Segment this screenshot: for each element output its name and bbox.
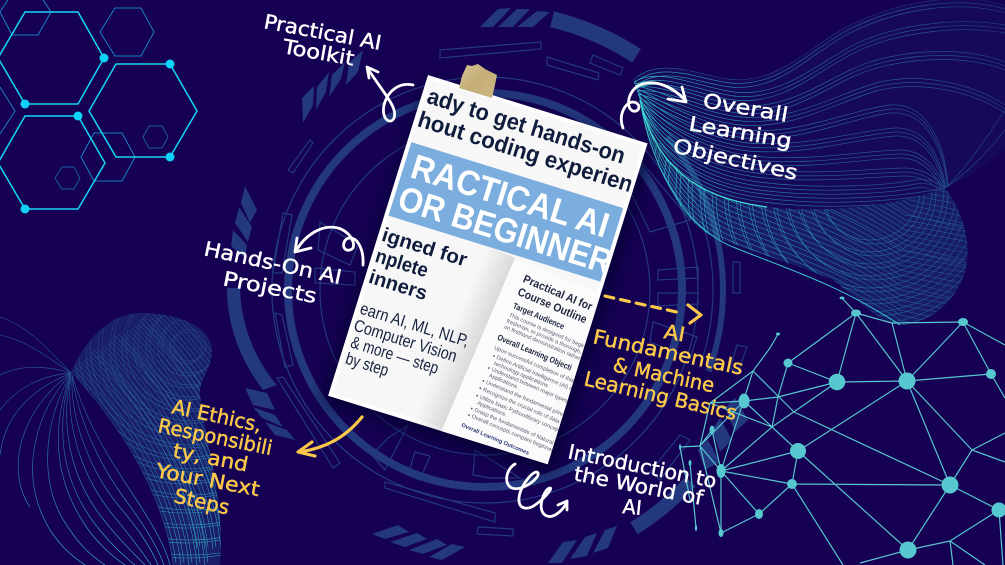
flyer subheading: igned for <box>379 224 470 271</box>
label: ai fundamentals and machine learning basics: Learning Basics <box>582 366 739 425</box>
label: ai ethics responsibility next steps: AI Ethics, <box>170 394 264 437</box>
label: hands-on ai projects <box>202 236 344 308</box>
outline body text: on firsthand demonstration rather, alike <box>503 324 594 368</box>
flyer subheading: nplete <box>373 245 431 282</box>
flyer headline: ady to get hands-on <box>424 83 629 169</box>
label: practical ai toolkit: Practical AI <box>262 9 383 55</box>
outline title: Target Audience <box>512 301 566 331</box>
label: hands-on ai projects: Hands-On AI <box>202 236 344 289</box>
label: ai fundamentals and machine learning basics: Fundamentals <box>591 324 746 380</box>
outline footer link: Overall Learning Outcomes <box>460 423 530 457</box>
arrow: learning objectives <box>621 83 686 128</box>
arrow: practical ai toolkit <box>367 67 413 121</box>
outline body text: Utilize basic Python/library concepts <box>479 395 564 435</box>
wave mesh: bottom left <box>0 313 221 565</box>
label: introduction to the world of ai: Introduction to <box>566 439 719 493</box>
flyer description: Computer Vision <box>352 316 459 366</box>
outline body text: Understand between major types of <box>490 367 574 407</box>
label: overall learning objectives: Learning <box>687 111 794 153</box>
flyer subheading: inners <box>366 266 430 305</box>
label: overall learning objectives <box>671 88 800 185</box>
arrow: introduction curl <box>507 464 567 517</box>
flyer blue banner <box>388 142 628 283</box>
tech hatch segments <box>227 8 748 563</box>
concentric tech rings <box>204 9 766 565</box>
outline title: Course Outline <box>516 286 588 326</box>
label: ai fundamentals and machine learning basics <box>582 319 746 425</box>
outline body text: Applications. <box>476 401 508 419</box>
label: ai ethics responsibility next steps: Your Next <box>153 458 262 501</box>
outline title <box>498 274 593 370</box>
outline body text: This course is designed for beginners a <box>508 313 601 357</box>
label: ai ethics responsibility next steps <box>153 394 274 519</box>
label: ai fundamentals and machine learning basics: & Machine <box>611 352 717 397</box>
paper flyer <box>328 75 648 464</box>
outline body text: Applications. <box>488 373 520 391</box>
label: hands-on ai projects: Projects <box>221 266 319 308</box>
neural network <box>679 296 1005 565</box>
outline body text: technology applications <box>493 361 549 389</box>
label: ai ethics responsibility next steps: Steps <box>172 483 232 519</box>
flyer description: by step <box>343 349 391 380</box>
flyer description: earn AI, ML, NLP, <box>358 299 471 351</box>
outline body text: Define Artificial Intelligence (AI) and i <box>495 355 582 396</box>
outline body text: Understand the fundamental principles of <box>485 380 581 425</box>
flyer blue banner: OR BEGINNER <box>393 179 617 282</box>
flyer description: & more — step <box>348 333 441 378</box>
outline title: Overall Learning Objecti <box>496 332 574 372</box>
flyer subheading <box>369 227 468 300</box>
label: overall learning objectives: Overall <box>701 88 790 127</box>
label: ai fundamentals and machine learning basics: AI <box>662 319 687 347</box>
label: ai ethics responsibility next steps: ty, and <box>171 438 250 476</box>
folded course outline page <box>421 250 601 464</box>
outline body text: Overall concepts compare beginners <box>470 414 557 455</box>
outline body text: Recognize the crucial role of data in the <box>482 387 575 431</box>
label: ai ethics responsibility next steps: Responsibili <box>156 413 274 460</box>
label: practical ai toolkit: Toolkit <box>280 34 356 70</box>
arrow: ai ethics <box>298 417 362 456</box>
tape <box>459 64 497 98</box>
label: introduction to the world of ai: the World of <box>572 461 706 510</box>
flyer headline: hout coding experien <box>415 106 636 197</box>
arrow: ai fundamentals dashed <box>605 296 701 323</box>
outline body text: Upon successful completion of this cour <box>493 345 586 389</box>
label: introduction to the world of ai: AI <box>621 494 643 520</box>
outline body text: freshman, to provide a thorough, data <box>505 318 594 361</box>
outline body text <box>472 312 585 452</box>
hexagon cluster <box>0 0 197 214</box>
label: practical ai toolkit <box>262 9 383 70</box>
label: overall learning objectives: Objectives <box>671 133 800 185</box>
label: introduction to the world of ai <box>566 439 719 520</box>
flyer description <box>345 306 467 378</box>
outline bullets <box>468 355 495 416</box>
wave mesh: top right <box>633 0 1005 326</box>
outline body text: Grasp the fundamentals of Natural Langu <box>473 407 570 453</box>
outline title: Practical AI for <box>521 273 594 314</box>
flyer blue banner: RACTICAL AI <box>406 147 614 246</box>
paper shadow <box>322 82 650 474</box>
arrow: hands-on projects <box>295 227 363 265</box>
